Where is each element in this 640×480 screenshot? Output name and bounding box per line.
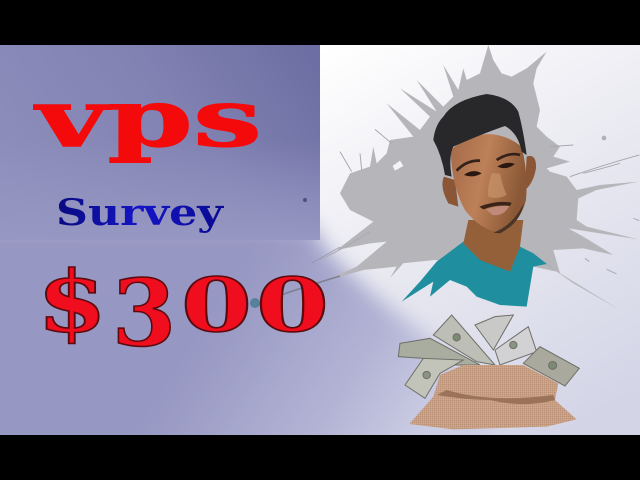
money bag [398, 315, 579, 429]
prize amount: $300: 3 [112, 259, 176, 367]
face [451, 134, 527, 233]
eyes and brows [457, 154, 520, 176]
nose [488, 173, 507, 198]
dot marks [250, 198, 340, 308]
mouth and beard [479, 202, 524, 233]
prize amount: $300 [37, 252, 329, 367]
hair [433, 94, 527, 177]
bottom letterbox bar [0, 435, 640, 480]
dollar bills [398, 315, 579, 398]
prize amount: $300: 0 [181, 263, 252, 349]
prize amount: $300: 0 [256, 263, 329, 349]
paint splatter behind portrait [320, 45, 639, 310]
subtitle: Survey: Survey [56, 192, 224, 234]
title: vps: vps [33, 71, 262, 165]
top letterbox bar [0, 0, 640, 45]
portrait of young man [402, 94, 557, 307]
neck [463, 220, 523, 272]
ears [442, 156, 536, 207]
prize amount: $300: $ [37, 252, 107, 351]
burlap sack [409, 365, 577, 429]
teal shirt [402, 242, 557, 307]
